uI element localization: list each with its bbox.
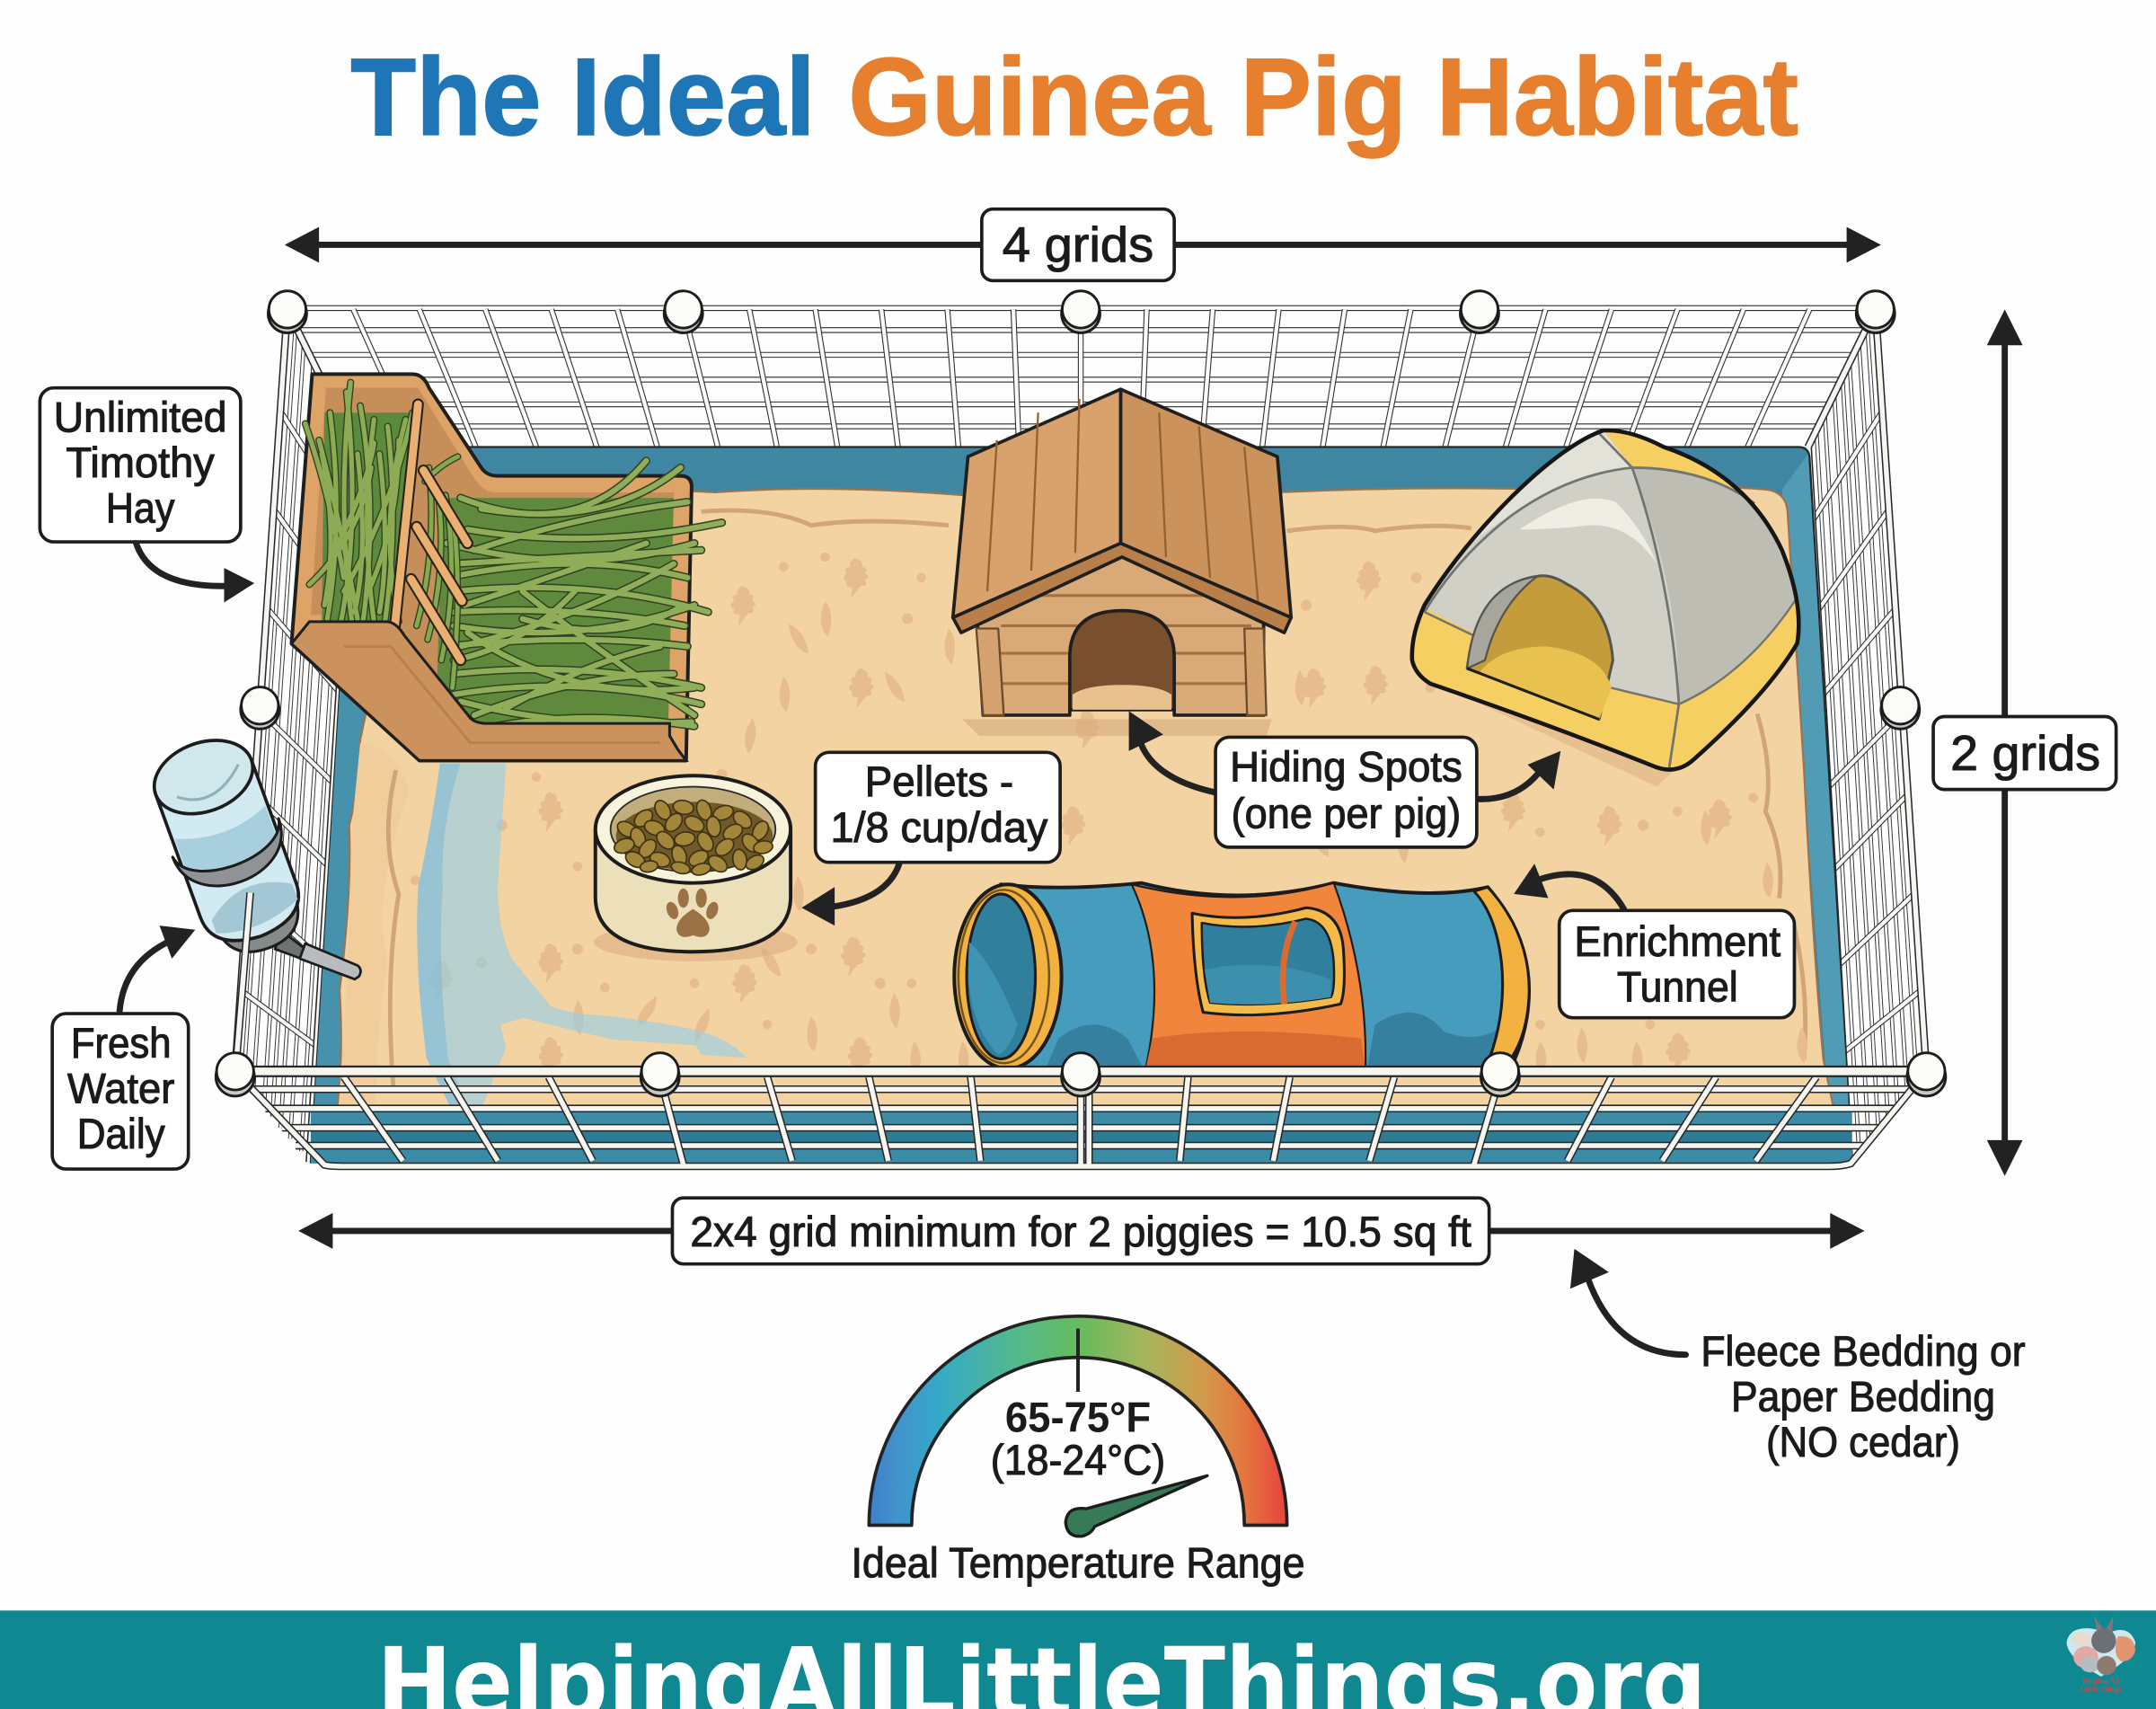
right dimension: 2 grids	[1933, 309, 2116, 1176]
top dimension: 4 grids: 4 grids	[1003, 217, 1153, 272]
temperature gauge	[851, 1316, 1305, 1588]
right dimension: 2 grids: 2 grids	[1950, 725, 2100, 781]
title: Guinea Pig Habitat	[848, 35, 1798, 158]
bedding leaf and dot texture	[411, 553, 1807, 1076]
food bowl with pellets	[594, 775, 798, 961]
tunnel mouth	[954, 884, 1062, 1068]
water bottle	[138, 725, 360, 979]
title: The Ideal	[350, 35, 816, 158]
cage front wall	[235, 1071, 1926, 1166]
callout: unlimited timothy hay: Timothy	[66, 439, 215, 487]
footer logo: Little Things	[2081, 1686, 2123, 1694]
callout: unlimited timothy hay	[40, 388, 254, 602]
gauge reading: 65-75°F	[1005, 1394, 1151, 1441]
title	[350, 35, 1798, 158]
temperature gauge: Ideal Temperature Range	[851, 1540, 1305, 1588]
bottom dimension: grid minimum	[298, 1198, 1865, 1264]
gauge needle	[1065, 1475, 1207, 1536]
hay rack	[291, 374, 722, 760]
callout: pellets	[801, 752, 1060, 925]
callout: fresh water daily: Fresh	[71, 1020, 172, 1067]
callout: fleece bedding	[1570, 1249, 2026, 1466]
footer logo	[2067, 1616, 2135, 1694]
footer band	[0, 1610, 2156, 1709]
bottom dimension: grid minimum: 2x4 grid minimum for 2 piggies = 10.5 sq ft	[690, 1209, 1471, 1256]
callout: pellets: Pellets -	[865, 758, 1013, 806]
callout: fleece bedding: Paper Bedding	[1731, 1373, 1995, 1421]
gauge reading: (18-24°C)	[991, 1437, 1165, 1484]
callout: hiding spots: Hiding Spots	[1230, 743, 1462, 791]
doghouse hiding spot	[953, 389, 1291, 736]
rack bars	[394, 404, 467, 660]
callout: fleece bedding: Fleece Bedding or	[1701, 1328, 2026, 1376]
callout: fresh water daily: Water	[67, 1066, 175, 1113]
igloo outline	[1412, 430, 1798, 770]
hay in floor of rack	[417, 456, 722, 729]
doghouse roof	[1120, 389, 1291, 617]
tunnel window	[1192, 908, 1344, 1015]
bottle nozzle	[275, 931, 360, 979]
callout: fresh water daily: Daily	[77, 1111, 165, 1158]
play tunnel	[954, 883, 1529, 1070]
bedding	[337, 487, 1834, 1111]
callout: unlimited timothy hay: Unlimited	[54, 394, 227, 442]
paw print	[664, 889, 720, 937]
cage back wall	[287, 308, 1876, 447]
callout: enrichment tunnel	[1514, 863, 1794, 1018]
callout: fresh water daily	[52, 925, 195, 1169]
callout: pellets: 1/8 cup/day	[830, 804, 1048, 852]
callout: enrichment tunnel: Enrichment	[1575, 918, 1780, 966]
cage connector posts	[216, 291, 1946, 1096]
pellets	[612, 798, 773, 877]
front face of rack	[291, 622, 686, 760]
wire passing in front of bottle	[236, 892, 251, 1059]
doghouse door	[1070, 611, 1174, 710]
blue plastic tray	[311, 447, 1852, 1164]
gauge arc	[869, 1316, 1287, 1525]
callout: fleece bedding: (NO cedar)	[1766, 1419, 1960, 1466]
igloo doorway	[1467, 576, 1613, 720]
footer logo: Helping All	[2082, 1678, 2120, 1686]
hay bundle behind bar	[305, 383, 412, 622]
gauge reading	[991, 1394, 1165, 1484]
dome igloo hiding spot	[1412, 430, 1798, 787]
callout: unlimited timothy hay: Hay	[106, 485, 175, 533]
water spill stain	[417, 764, 747, 1106]
top dimension: 4 grids	[285, 209, 1881, 280]
cage side walls	[235, 309, 1926, 1162]
callout: hiding spots	[1129, 711, 1560, 847]
callout: hiding spots: (one per pig)	[1232, 790, 1461, 837]
callout: enrichment tunnel: Tunnel	[1617, 963, 1738, 1011]
